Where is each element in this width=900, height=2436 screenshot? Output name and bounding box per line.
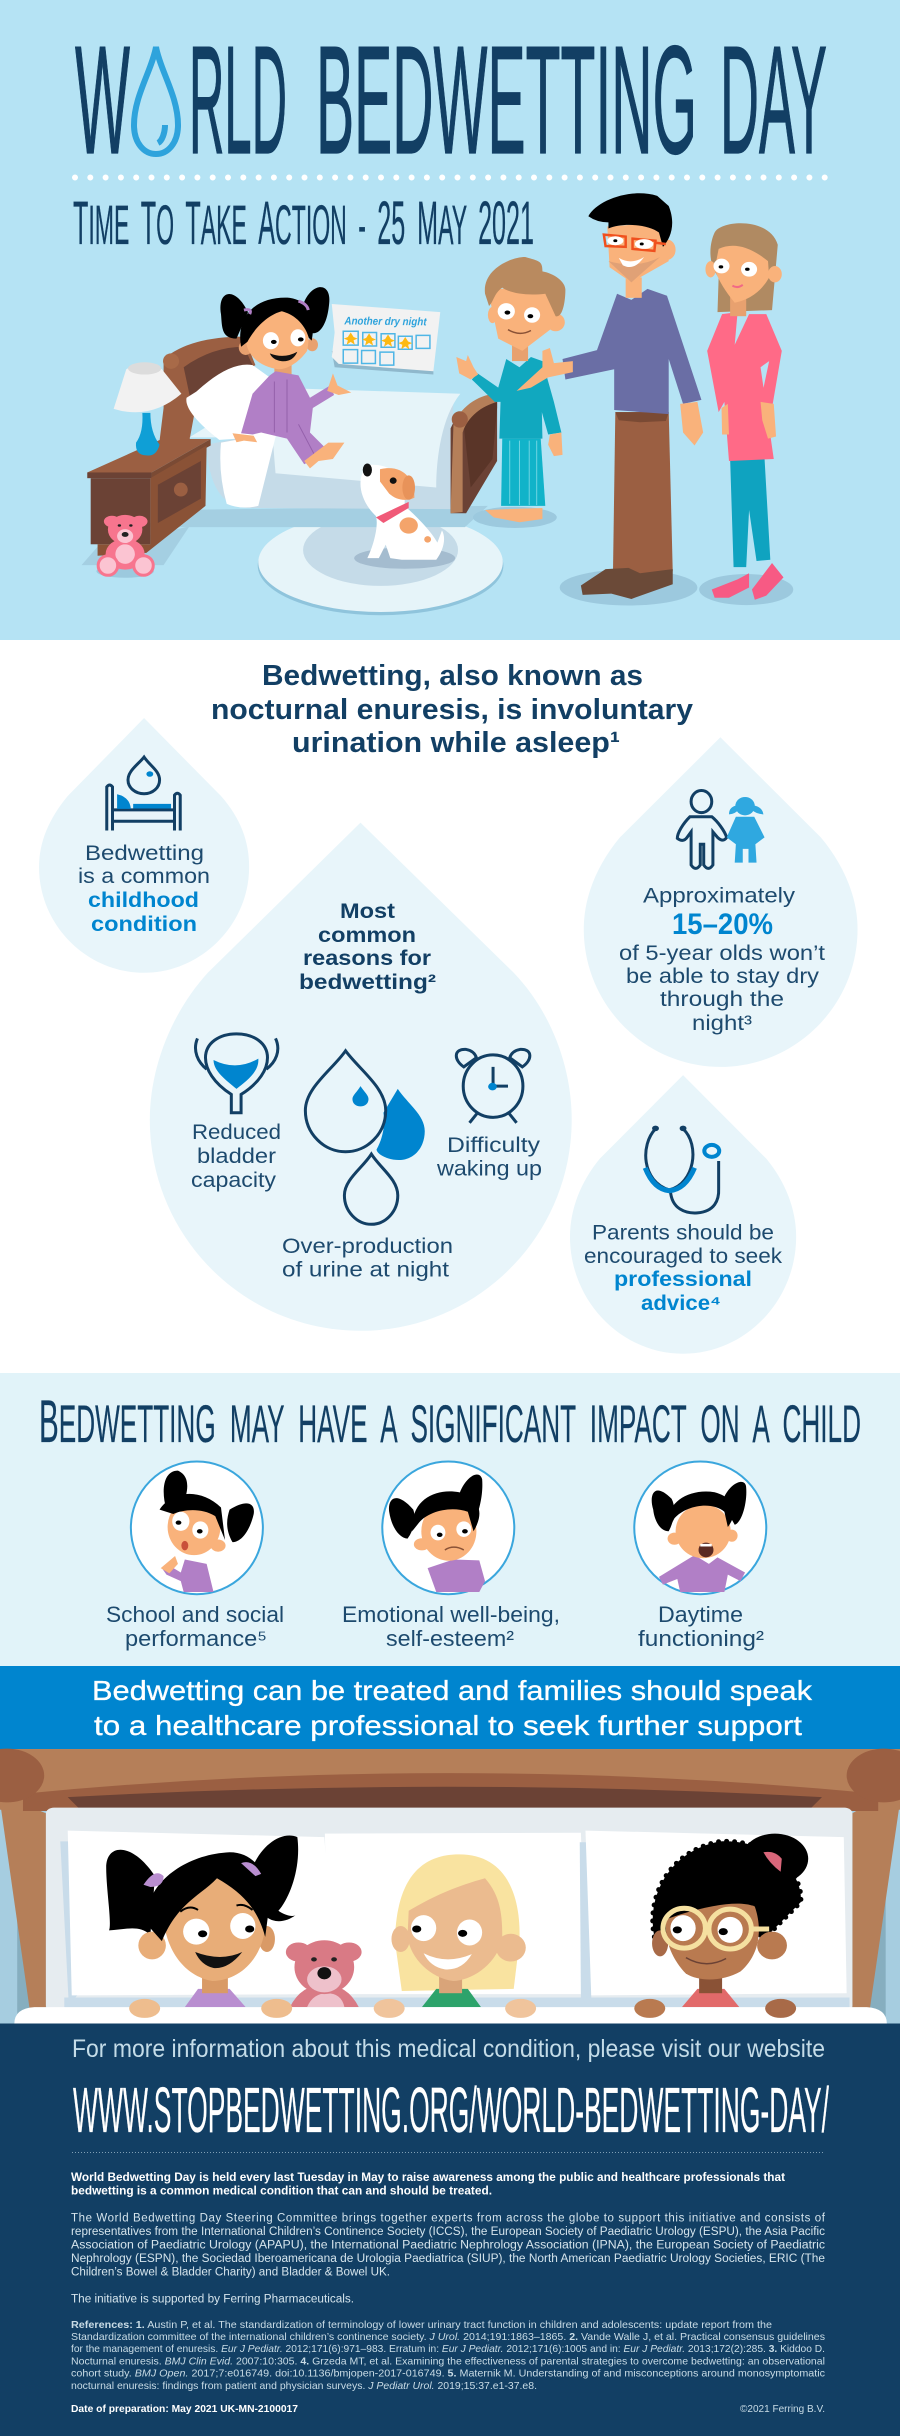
bed frame (0, 1749, 900, 2027)
rug (258, 512, 503, 615)
text: childhood condition: condition (91, 913, 197, 936)
text: most common reasons: reasons for (303, 947, 431, 970)
text: school and social performance: performance⁵ (125, 1626, 267, 1651)
text: references: Standardization committee of the international children’s continence society. J Urol. 2014;191:1863–1865. 2. Vande Walle J, et al. Practical consensus guidelines (71, 2331, 825, 2343)
text: 15-20 percent: 15–20% (672, 908, 773, 941)
text: 15-20 percent: be able to stay dry (626, 965, 820, 988)
text: difficulty waking up (436, 1134, 542, 1181)
icons (107, 757, 765, 1224)
text: over-production (282, 1235, 453, 1282)
text: copyright: ©2021 Ferring B.V. (740, 2403, 825, 2415)
text: over-production: Over-production (282, 1235, 453, 1258)
text: steering committee: Association of Paediatric Urology (APAPU), the International Paediatric Nephrology Association (IPNA), the European Society of Paediatric (71, 2240, 825, 2252)
heading: definition (211, 660, 693, 759)
icon: drops (305, 1051, 425, 1224)
text: more information: For more information about this medical condition, please visit our website (72, 2035, 825, 2063)
text: over-production: of urine at night (282, 1259, 449, 1282)
text: most common reasons: Most (340, 900, 395, 923)
text: about the day: bedwetting is a common medical condition that can and should be treated. (71, 2185, 492, 2197)
text: daytime functioning (638, 1602, 764, 1651)
text: references: Nocturnal enuresis. BMJ Clin Evid. 2007:10:305. 4. Grzeda MT, et al. Examining the effectiveness of parental strategies to overcome bedwetting: an observational (71, 2356, 825, 2368)
text: steering committee: The World Bedwetting Day Steering Committee brings together experts from across the globe to support this initiative and consists of (71, 2213, 826, 2225)
text: references: for the management of enuresis. Eur J Pediatr. 2012;171(6):971–983. Erratum in: Eur J Pediatr. 2012;171(6):1005 and in: Eur J Pediatr. 2013;172(2):285. 3. Kiddoo D. (71, 2343, 825, 2355)
panel: hero background (0, 0, 900, 640)
text: professional advice: professional (614, 1268, 752, 1291)
text: emotional well-being: Emotional well-being, (342, 1602, 560, 1627)
icon: bed with drop (107, 757, 180, 830)
banner: seek support (0, 1666, 900, 1749)
dotted divider (75, 174, 826, 180)
text: references (71, 2319, 825, 2392)
panel: what is bedwetting (0, 640, 900, 1373)
father (517, 193, 703, 605)
text: daytime functioning: functioning² (638, 1626, 764, 1651)
text: childhood condition (78, 842, 210, 936)
text: most common reasons: common (318, 924, 416, 947)
text: references: nocturnal enuresis: findings from patient and physician surveys. J Pediatr Urol. 2019;15:37.e1-37.e8. (71, 2380, 537, 2392)
heading: definition: nocturnal enuresis, is involuntary (211, 694, 693, 726)
text: school and social performance (106, 1602, 284, 1651)
portrait: yawning girl (634, 1461, 766, 1594)
title: W (75, 14, 130, 186)
nightstand (82, 439, 211, 565)
text: steering committee (71, 2213, 826, 2279)
blanket and hands (14, 1999, 887, 2024)
teddy bear (286, 1940, 362, 2007)
text: childhood condition: is a common (78, 865, 210, 888)
icon: water drop in title (134, 47, 178, 154)
text: reduced bladder capacity: Reduced (192, 1121, 281, 1144)
teddy bear (96, 515, 154, 578)
text: 15-20 percent: Approximately (643, 884, 796, 908)
text: supported by: The initiative is supported by Ferring Pharmaceuticals. (71, 2294, 354, 2306)
subtitle: TIME TO TAKE ACTION - 25 MAY 2021 (73, 189, 534, 257)
text: professional advice (584, 1222, 783, 1315)
text: about the day: World Bedwetting Day is held every last Tuesday in May to raise awareness among the public and healthcare professionals that (71, 2172, 785, 2184)
child: girl with glasses (652, 1834, 808, 2007)
text: steering committee: Children’s Bowel & Bladder Charity) and Bladder & Bowel UK. (71, 2267, 390, 2279)
text: most common reasons: bedwetting² (299, 971, 436, 994)
dog (360, 463, 444, 560)
heading: definition: Bedwetting, also known as (262, 660, 643, 692)
text: references: References: 1. Austin P, et al. The standardization of terminology of lower urinary tract function in children and adolescents: update report from the (71, 2319, 772, 2331)
text: professional advice: Parents should be (592, 1222, 774, 1244)
text: childhood condition: Bedwetting (85, 842, 204, 865)
portrait: sad girl (382, 1461, 514, 1594)
icon: children (677, 791, 765, 868)
text: about the day (71, 2172, 785, 2197)
text: reduced bladder capacity: capacity (191, 1169, 277, 1192)
girl on bed (220, 287, 351, 468)
text: references: cohort study. BMJ Open. 2017;7:e016749. doi:10.1136/bmjopen-2017-016749. 5. Maternik M. Understanding of and misconceptions around monosymptomatic (71, 2368, 825, 2380)
portrait: thinking girl (131, 1461, 263, 1594)
text: most common reasons (299, 900, 436, 994)
drops backgrounds (39, 718, 858, 1354)
text: emotional well-being: self-esteem² (386, 1626, 514, 1651)
text: emotional well-being (342, 1602, 560, 1651)
text: professional advice: advice⁴ (641, 1292, 721, 1315)
child: blonde girl (391, 1854, 526, 2007)
text: 15-20 percent (619, 884, 825, 1035)
child: girl with pigtails (106, 1836, 298, 2007)
text: 15-20 percent: night³ (692, 1012, 752, 1035)
hero illustration (82, 193, 793, 615)
text: 15-20 percent: of 5-year olds won’t (619, 942, 825, 965)
text: difficulty waking up: waking up (436, 1158, 542, 1181)
boy (456, 257, 565, 528)
text: school and social performance: School and social (106, 1602, 284, 1627)
text: 15-20 percent: through the (660, 988, 784, 1011)
lamp (114, 362, 181, 456)
icon: alarm clock (456, 1049, 530, 1123)
text: steering committee: representatives from the International Children’s Continence Society (ICCS), the European Society of Paediatric Urology (ESPU), the Asia Pacific (71, 2226, 825, 2238)
text: date of preparation: Date of preparation: May 2021 UK-MN-2100017 (71, 2403, 298, 2415)
reward chart: Another dry night (344, 315, 427, 328)
pillows (46, 1808, 852, 2011)
icon: bladder (195, 1034, 278, 1113)
reward chart (332, 304, 440, 375)
heading: definition: urination while asleep¹ (292, 727, 620, 759)
text: difficulty waking up: Difficulty (447, 1134, 541, 1157)
panel: impact on a child (0, 1373, 900, 1666)
mother (699, 223, 793, 605)
banner: seek support: to a healthcare professional to seek further support (94, 1710, 802, 1741)
text: professional advice: encouraged to seek (584, 1245, 783, 1268)
text: childhood condition: childhood (88, 889, 199, 912)
illustration: children in bed (0, 1749, 900, 2027)
icon: stethoscope (645, 1126, 719, 1213)
title: RLD (189, 14, 287, 186)
text: reduced bladder capacity: bladder (197, 1145, 276, 1168)
text: steering committee: Nephrology (ESPN), the Sociedad Iberoamericana de Urologia Paediatrica (SIUP), the North American Paediatric Urology Societies, ERIC (The (71, 2253, 825, 2265)
text: reduced bladder capacity (191, 1121, 281, 1192)
bed (144, 337, 497, 527)
text: daytime functioning: Daytime (658, 1602, 743, 1627)
title (75, 14, 827, 186)
banner: seek support: Bedwetting can be treated and families should speak (92, 1675, 813, 1706)
panel: footer (0, 2024, 900, 2436)
